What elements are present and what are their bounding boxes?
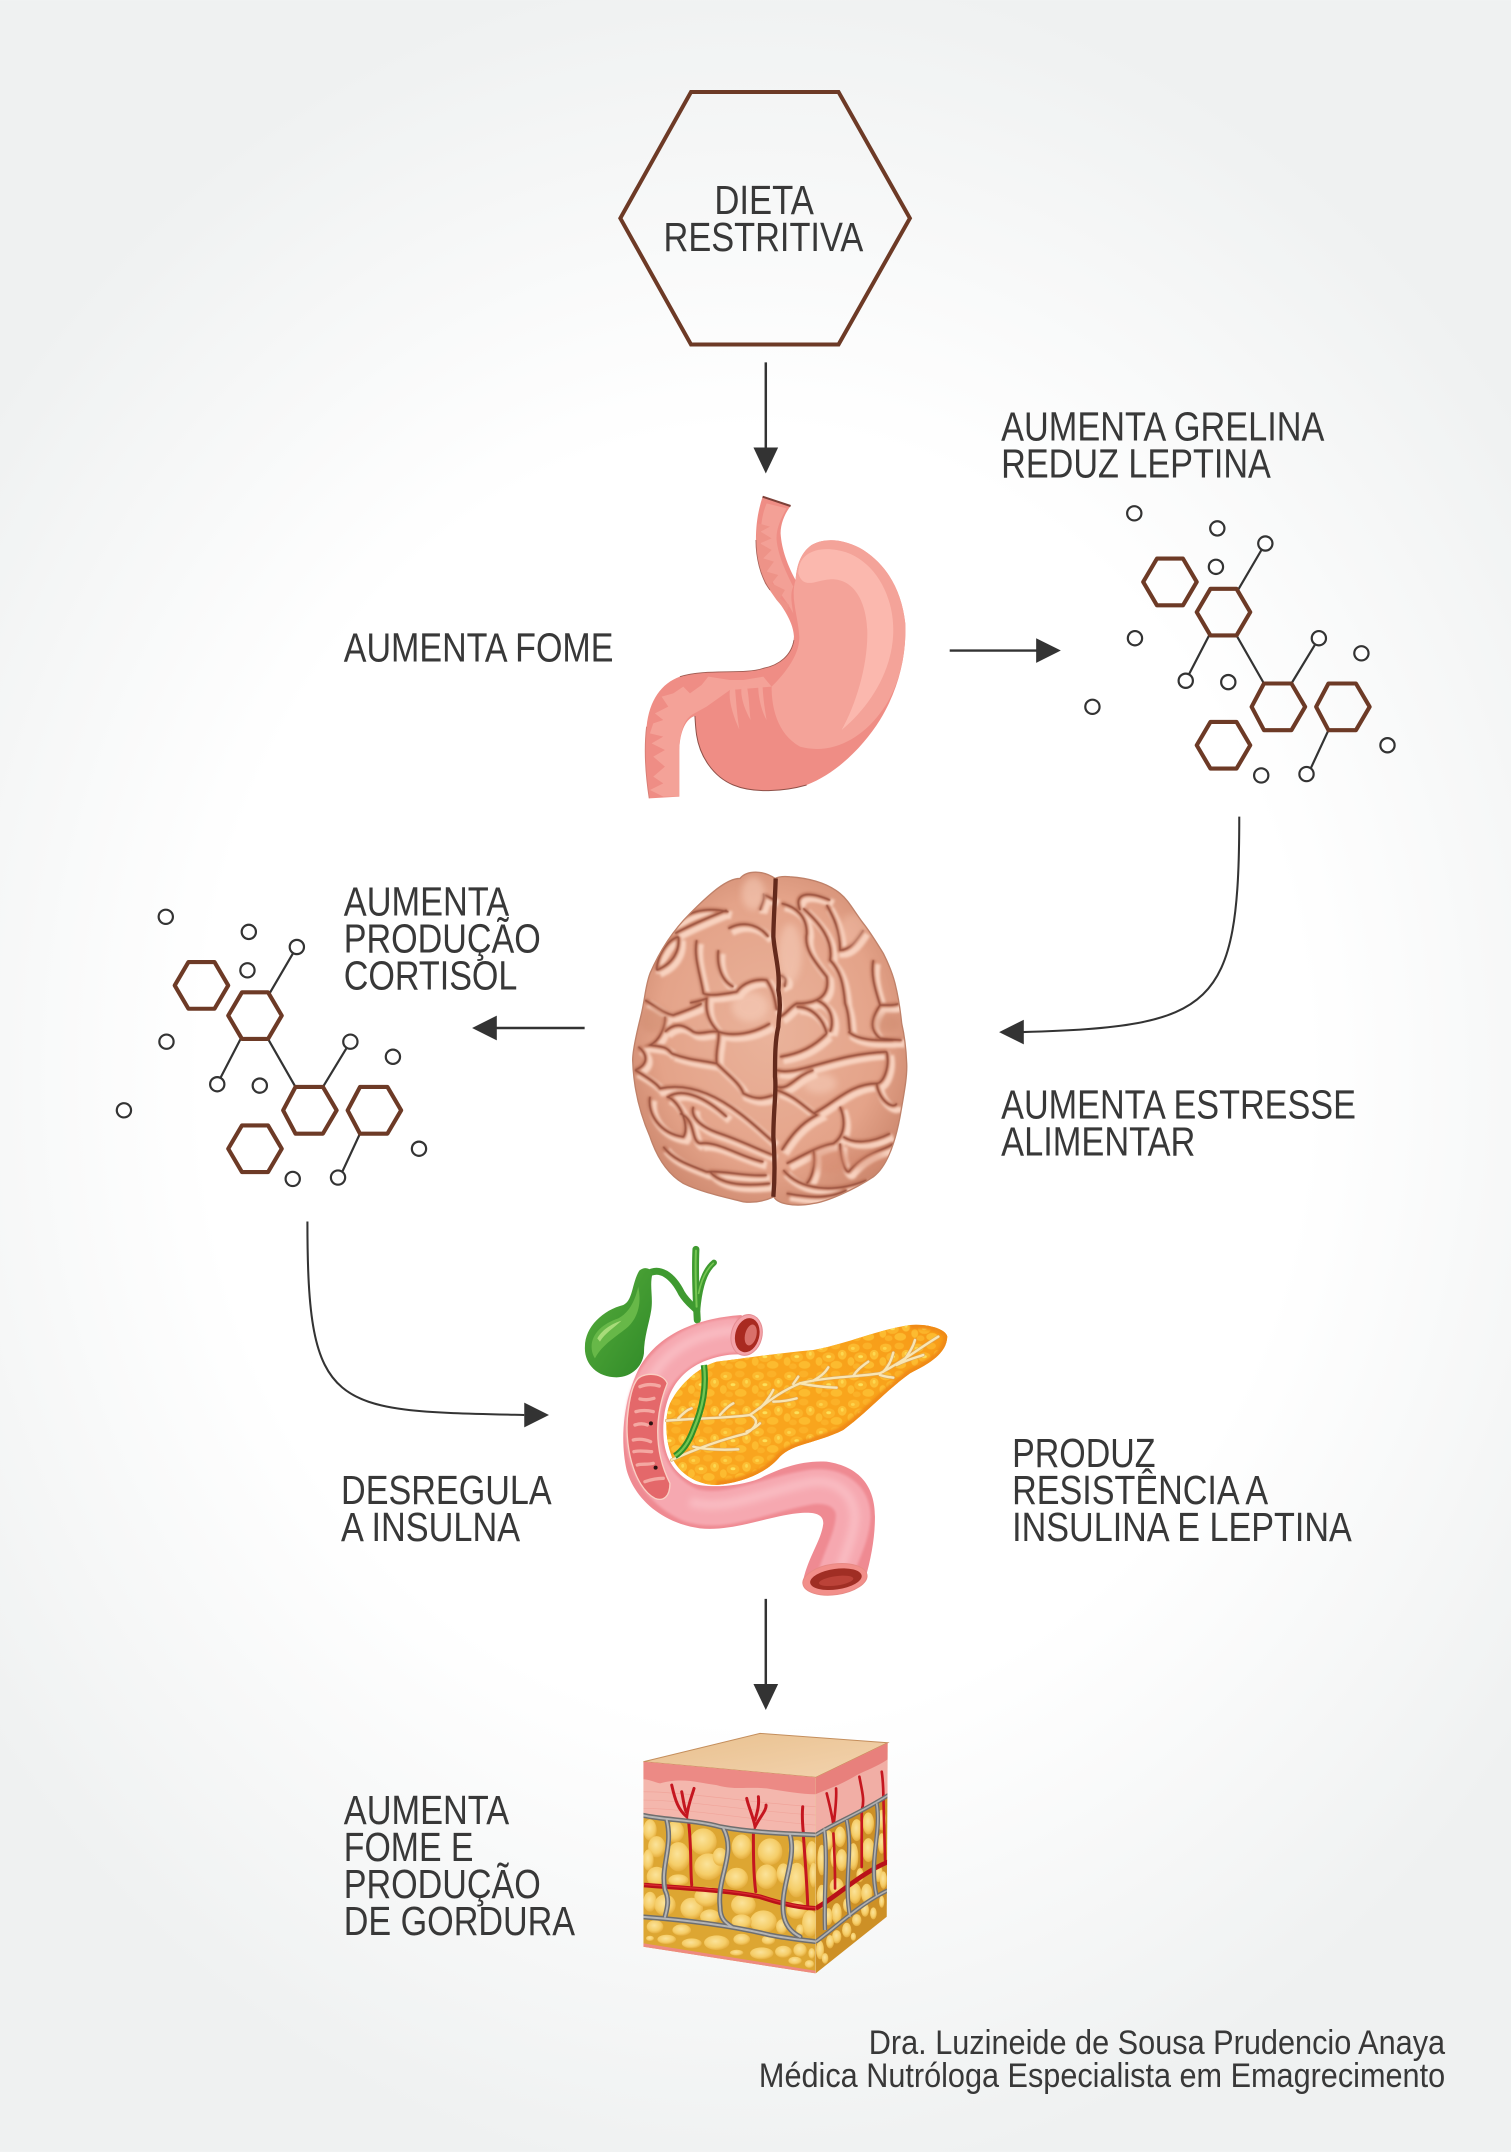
- footer: author credit: Dra. Luzineide de Sousa Prudencio Anaya: [869, 2024, 1446, 2062]
- label: aumenta fome e producao de gordura: PRODUÇÃO: [344, 1861, 541, 1907]
- title: dieta restritiva: RESTRITIVA: [664, 214, 864, 260]
- front face: [640, 1757, 820, 1977]
- arrow: cortisol to pancreas (curved): [307, 1221, 549, 1427]
- arrow: hexagon to stomach: [753, 362, 778, 474]
- label: aumenta fome e producao de gordura: DE GORDURA: [344, 1898, 575, 1944]
- hexagon: dieta restritiva: [620, 92, 910, 345]
- icon: molecule left: [117, 910, 426, 1186]
- label: aumenta estresse alimentar: ALIMENTAR: [1001, 1119, 1195, 1165]
- arrow: pancreas to fat: [753, 1599, 778, 1710]
- arrow: hormones to brain (curved): [999, 817, 1239, 1044]
- right face: [813, 1740, 890, 1978]
- label: desregula a insulna: DESREGULA: [341, 1467, 552, 1513]
- arrow: brain to cortisol: [472, 1016, 585, 1040]
- icon: molecule right: [1085, 506, 1395, 783]
- footer: author credit: [759, 2024, 1446, 2095]
- label: aumenta fome e producao de gordura: AUMENTA: [344, 1787, 510, 1833]
- icon: pancreas, duodenum and gallbladder: [585, 1249, 947, 1599]
- label: aumenta estresse alimentar: [1001, 1082, 1356, 1165]
- label: aumenta fome e producao de gordura: FOME E: [344, 1824, 473, 1870]
- label: aumenta producao cortisol: AUMENTA: [344, 878, 510, 924]
- label: aumenta estresse alimentar: AUMENTA ESTRESSE: [1001, 1082, 1356, 1128]
- label: produz resistencia a insulina e leptina: INSULINA E LEPTINA: [1012, 1504, 1352, 1550]
- label: aumenta grelina reduz leptina: AUMENTA GRELINA: [1001, 404, 1325, 450]
- arrow: stomach to hormones: [950, 638, 1061, 663]
- label: produz resistencia a insulina e leptina: PRODUZ: [1012, 1430, 1156, 1476]
- icon: skin and fat tissue cube: [640, 1733, 890, 1978]
- label: produz resistencia a insulina e leptina: RESISTÊNCIA A: [1012, 1467, 1269, 1513]
- label: aumenta fome e producao de gordura: [344, 1787, 575, 1944]
- label: produz resistencia a insulina e leptina: [1012, 1430, 1352, 1550]
- duodenum: [623, 1311, 875, 1599]
- label: aumenta producao cortisol: [344, 878, 541, 999]
- title: dieta restritiva: [664, 177, 864, 260]
- pancreas body: [666, 1325, 947, 1485]
- label: aumenta grelina reduz leptina: REDUZ LEPTINA: [1001, 441, 1271, 487]
- label: aumenta fome: AUMENTA FOME: [344, 625, 613, 671]
- icon: stomach: [645, 497, 905, 798]
- label: aumenta producao cortisol: PRODUÇÃO: [344, 915, 541, 961]
- icon: brain: [633, 872, 907, 1205]
- gallbladder and ducts: [585, 1249, 714, 1377]
- label: desregula a insulna: A INSULNA: [341, 1504, 521, 1550]
- label: aumenta grelina reduz leptina: [1001, 404, 1325, 487]
- label: aumenta producao cortisol: CORTISOL: [344, 953, 517, 999]
- footer: author credit: Médica Nutróloga Especialista em Emagrecimento: [759, 2057, 1445, 2095]
- title: dieta restritiva: DIETA: [714, 177, 814, 223]
- label: desregula a insulna: [341, 1467, 552, 1550]
